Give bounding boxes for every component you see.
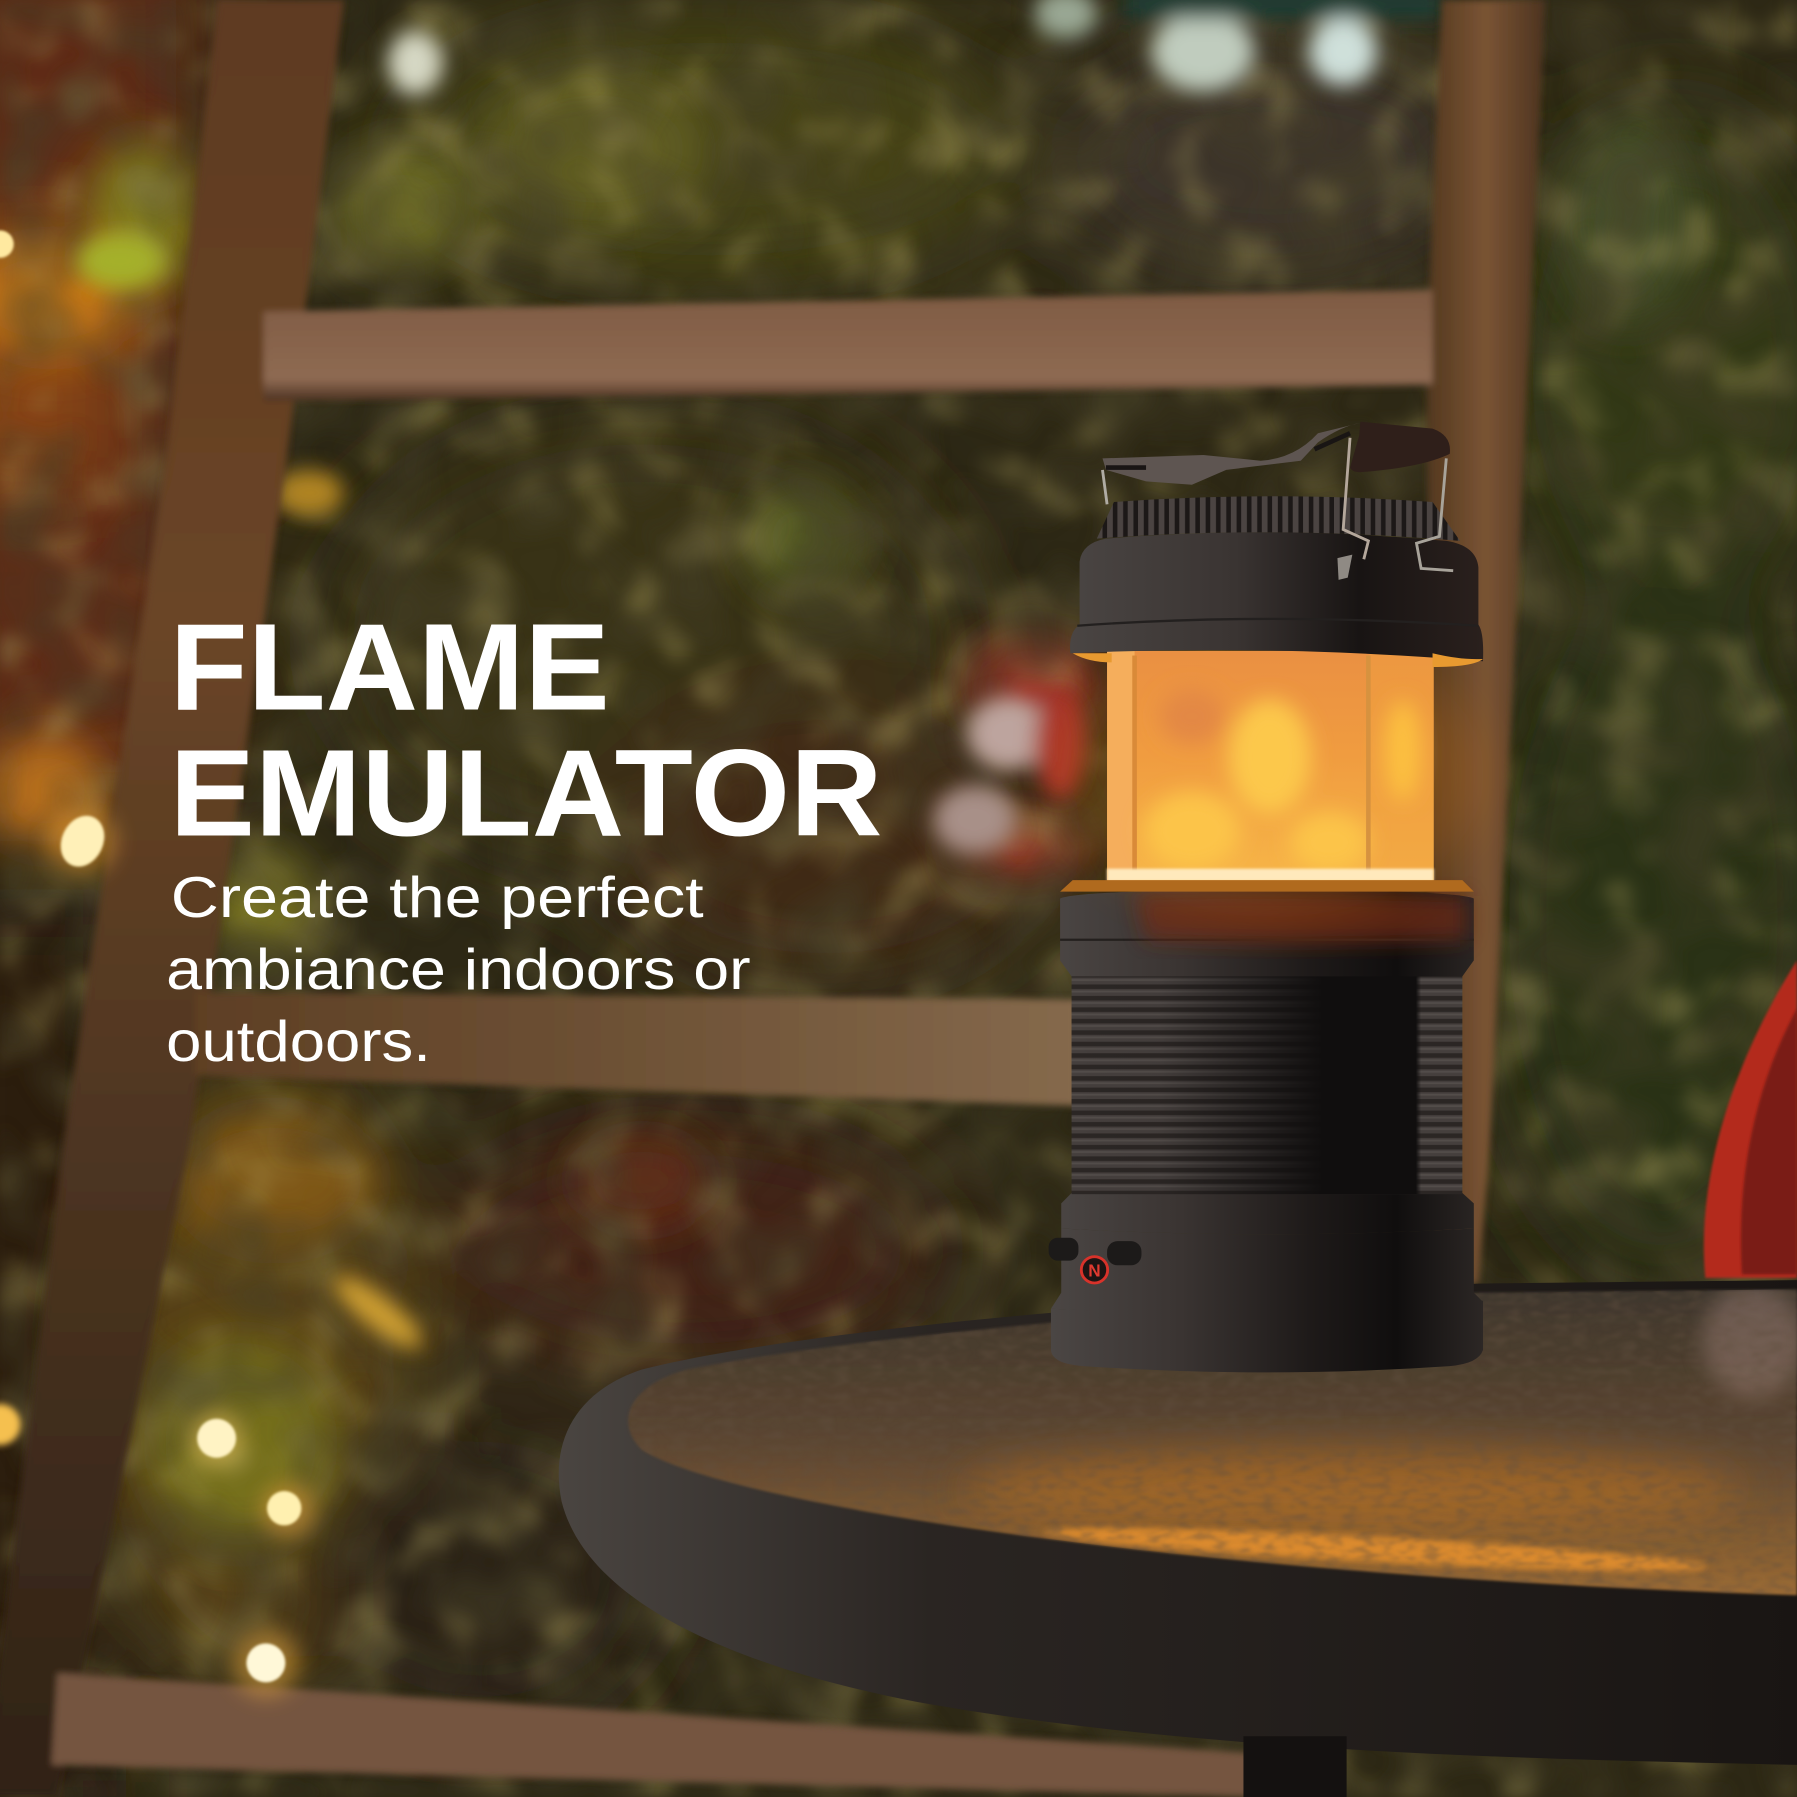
lantern foot xyxy=(1051,1301,1483,1372)
ladder left post xyxy=(0,0,344,1797)
ladder right post xyxy=(1427,0,1545,1284)
lantern handle xyxy=(1102,422,1453,580)
subtitle text block: Create the perfect xyxy=(171,866,704,930)
table rim and edge xyxy=(559,1280,1797,1765)
fairy light bokeh xyxy=(0,230,316,1697)
lantern lower collar xyxy=(1061,1193,1474,1234)
ladder middle rung xyxy=(195,992,1077,1106)
table top surface xyxy=(628,1289,1797,1595)
lantern xyxy=(1049,422,1484,1372)
subtitle text block xyxy=(166,866,751,1074)
lantern glowing diffuser xyxy=(1060,630,1484,917)
table xyxy=(559,1272,1797,1797)
title: Flame Emulator: EMULATOR xyxy=(170,724,882,862)
lantern lower band xyxy=(1051,1229,1483,1313)
lantern upper collar xyxy=(1060,889,1474,976)
lantern ribbed body xyxy=(1072,974,1462,1194)
table speckled texture and reflection xyxy=(607,1272,1797,1604)
subtitle text block: ambiance indoors or xyxy=(166,938,751,1002)
lantern top cap xyxy=(1070,532,1483,661)
title: Flame Emulator xyxy=(170,598,882,862)
ladder top rung xyxy=(264,290,1433,401)
lantern power buttons and logo: N xyxy=(1088,1261,1101,1281)
ladder bottom rung xyxy=(52,1673,1255,1797)
title: Flame Emulator: FLAME xyxy=(170,598,610,736)
table pedestal xyxy=(1243,1736,1347,1797)
lantern power buttons and logo xyxy=(1049,1238,1141,1283)
subtitle text block: outdoors. xyxy=(166,1010,431,1074)
red chair at right edge xyxy=(1704,960,1797,1278)
lantern ribbed top xyxy=(1097,496,1460,541)
